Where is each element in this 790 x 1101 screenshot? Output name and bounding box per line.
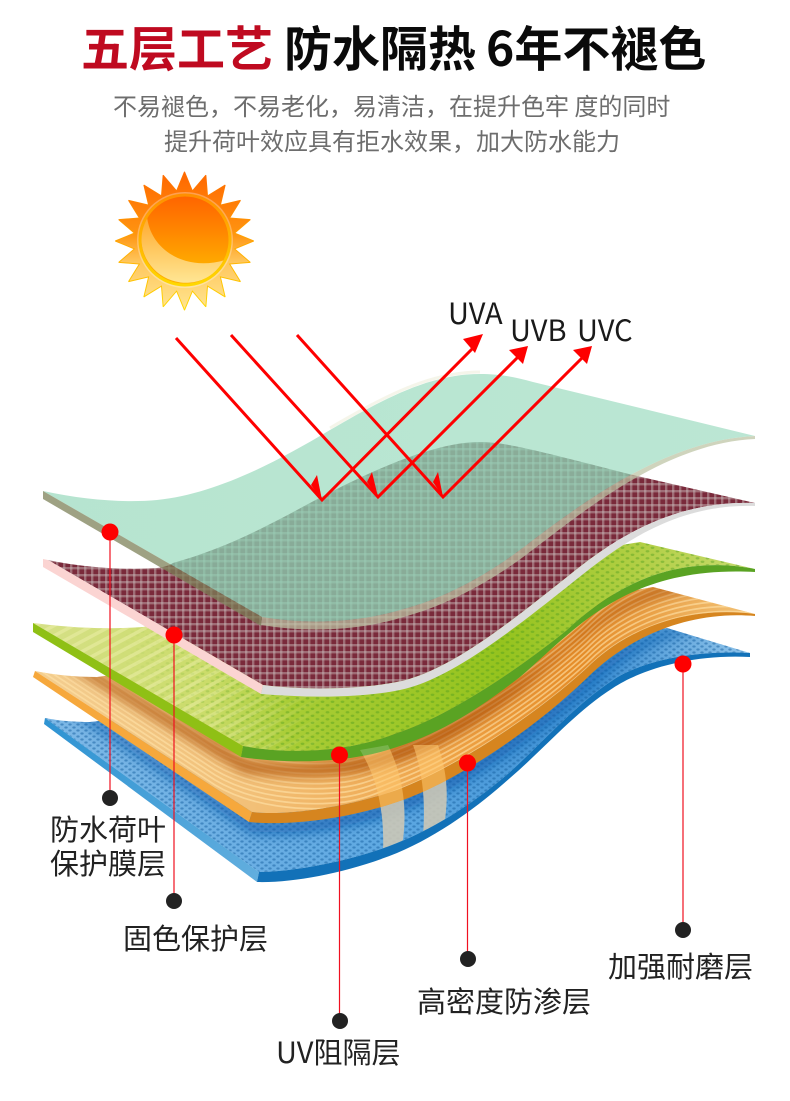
layer 5: blue wear-resistant layer	[35, 622, 755, 882]
title: 五层工艺	[81, 10, 273, 80]
arrow: UVB ray	[231, 335, 528, 497]
UV labels: UVA	[448, 291, 503, 333]
layer 2: plaid colour-fixing layer	[43, 442, 755, 697]
subtitle text	[113, 87, 670, 157]
callout: UV barrier layer	[276, 746, 400, 1072]
UV labels	[448, 291, 633, 350]
callout: colour-fixing layer: 固色保护层	[123, 916, 268, 958]
callout: waterproof lotus film	[50, 524, 166, 883]
arrow: UVC ray	[297, 335, 592, 497]
UV labels: UVC	[577, 308, 633, 350]
callout: colour-fixing layer	[123, 626, 268, 958]
title	[81, 10, 706, 80]
title: 防水隔热	[284, 10, 476, 80]
subtitle text: 提升荷叶效应具有拒水效果，加大防水能力	[164, 122, 620, 157]
layer 1: mint waterproof film	[43, 370, 755, 630]
callout: wear-resistant layer: 加强耐磨层	[608, 944, 753, 986]
callout: anti-seepage layer: 高密度防渗层	[417, 979, 591, 1021]
callout: waterproof lotus film: 防水荷叶	[50, 807, 166, 849]
callout: UV barrier layer: UV阻隔层	[276, 1030, 400, 1072]
layer 3: green UV barrier layer	[33, 542, 755, 762]
icon: sun	[115, 172, 254, 310]
callout: anti-seepage layer	[417, 754, 591, 1021]
title: 6年不褪色	[486, 10, 706, 80]
UV labels: UVB	[510, 308, 567, 350]
arrow: UVA ray	[176, 334, 483, 500]
subtitle text: 不易褪色，不易老化，易清洁，在提升色牢 度的同时	[113, 87, 670, 122]
layer 4: orange anti-seepage layer	[33, 587, 755, 824]
callout: wear-resistant layer	[608, 656, 753, 986]
callout: waterproof lotus film: 保护膜层	[50, 841, 166, 883]
